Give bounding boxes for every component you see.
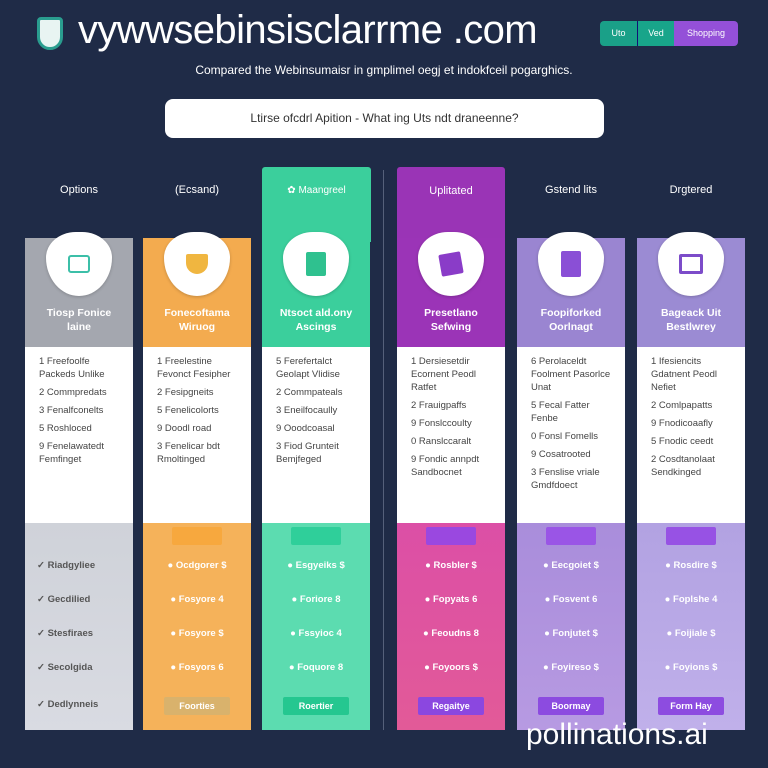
panel: column 4: 0 Ranslccaralt (411, 436, 471, 447)
panel: column 6: ● Foijiale $ (666, 628, 716, 639)
panel: column 4: ● Feoudns 8 (423, 628, 479, 639)
panel: column 5: Boormay (551, 701, 590, 711)
panel: column 3: ● Fssyioc 4 (290, 628, 342, 639)
panel: column 3: Ntsoct ald.ony (280, 307, 352, 319)
panel: column 3: Ascings (296, 321, 336, 333)
panel: column 1: Tiosp Fonice (47, 307, 111, 319)
divider (383, 170, 384, 730)
panel: column 1: 5 Roshloced (39, 423, 92, 434)
panel: column 3: ● Foriore 8 (291, 594, 341, 605)
panel: column 1: ✓ Dedlynneis (37, 699, 98, 710)
panel: column 5: ● Fosvent 6 (545, 594, 597, 605)
panel: column 6: ● Foplshe 4 (665, 594, 717, 605)
panel: column 6: 2 Comlpapatts (651, 400, 712, 411)
panel: column 4: 9 Fondic annpdt Sandbocnet (411, 454, 479, 478)
panel: column 2: 5 Fenelicolorts (157, 405, 219, 416)
panel: column 2: Fonecoftama (164, 307, 230, 319)
icon: book (538, 232, 604, 296)
header tab: col3: ✿ Maangreel (287, 185, 346, 196)
panel: column 4: Regaitye (432, 701, 470, 711)
top pills: Shopping (687, 28, 725, 38)
panel: column 5: ● Foyireso $ (543, 662, 599, 673)
top pills: Uto (611, 28, 626, 38)
subtitle: Compared the Webinsumaisr in gmplimel oegj et indokfceil pogarghics. (195, 63, 573, 77)
header label: col2: (Ecsand) (175, 184, 219, 196)
panel: column 3: Roertier (299, 701, 333, 711)
panel: column 1: 3 Fenalfconelts (39, 405, 103, 416)
panel: column 6: Form Hay (670, 701, 712, 711)
watermark: pollinations.ai (526, 718, 708, 751)
panel: column 2: ● Fosyore $ (170, 628, 224, 639)
panel: column 5: 9 Cosatrooted (531, 449, 591, 460)
panel: column 1: ✓ Secolgida (37, 662, 92, 673)
panel: column 5: 0 Fonsl Fomells (531, 431, 598, 442)
panel: column 5: 3 Fenslise vriale Gmdfdoect (531, 467, 600, 491)
panel: column 1: ✓ Gecdilied (37, 594, 90, 605)
icon: trophy (164, 232, 230, 296)
panel: column 4: 9 Fonslccoulty (411, 418, 472, 429)
header tab: col4: Uplitated (429, 185, 473, 197)
panel: column 1: laine (67, 321, 91, 333)
panel: column 1: 2 Commpredats (39, 387, 107, 398)
panel: column 2: ● Fosyors 6 (170, 662, 224, 673)
panel: column 1 (25, 232, 133, 730)
panel: column 5: ● Fonjutet $ (544, 628, 598, 639)
panel: column 3: 9 Ooodcoasal (276, 423, 335, 434)
panel: column 2: Wiruog (179, 321, 215, 333)
panel: column 2: ● Fosyore 4 (170, 594, 224, 605)
title: vywwsebinsisclarrme .com (78, 8, 537, 52)
header tab: col3 (262, 167, 371, 242)
header label: col5: Gstend lits (545, 184, 597, 196)
panel: column 2: 3 Fenelicar bdt Rmoltinged (157, 441, 220, 465)
panel: column 3: 2 Commpateals (276, 387, 343, 398)
panel: column 4: Presetlano (424, 307, 478, 319)
panel: column 6 (637, 232, 745, 730)
panel: column 2: ● Ocdgorer $ (167, 560, 227, 571)
panel: column 2: Foorties (179, 701, 215, 711)
panel: column 3: 5 Ferefertalct Geolapt Vlidise (276, 356, 340, 380)
panel: column 6: Bestlwrey (666, 321, 716, 333)
panel: column 3: ● Foquore 8 (289, 662, 343, 673)
logo icon (37, 17, 63, 50)
search bar (165, 99, 604, 138)
panel: column 6: 2 Cosdtanolaat Sendkinged (651, 454, 715, 478)
panel: column 3: 3 Eneilfocaully (276, 405, 337, 416)
panel: column 4: 1 Dersiesetdir Ecornent Peodl Ratfet (411, 356, 476, 393)
panel: column 5: ● Eecgoiet $ (543, 560, 599, 571)
panel: column 6: 9 Fnodicoaafly (651, 418, 713, 429)
icon: chart (658, 232, 724, 296)
panel: column 5: 5 Fecal Fatter Fenbe (531, 400, 590, 424)
panel: column 5: Foopiforked (541, 307, 601, 319)
panel: column 2: 1 Freelestine Fevonct Fesipher (157, 356, 230, 380)
panel: column 5 (517, 232, 625, 730)
header tab: col4 (397, 167, 505, 242)
panel: column 3: 3 Fiod Grunteit Bemjfeged (276, 441, 339, 465)
panel: column 2: 2 Fesipgneits (157, 387, 214, 398)
icon: purple card (418, 232, 484, 296)
header label: col6: Drgtered (670, 184, 712, 196)
top pills: Ved (648, 28, 664, 38)
icon: document (283, 232, 349, 296)
panel: column 3: ● Esgyeiks $ (287, 560, 345, 571)
panel: column 2: 9 Doodl road (157, 423, 211, 434)
panel: column 4: ● Fopyats 6 (425, 594, 477, 605)
panel: column 6: ● Foyions $ (665, 662, 717, 673)
panel: column 4: ● Foyoors $ (424, 662, 478, 673)
panel: column 6: ● Rosdire $ (665, 560, 717, 571)
icon: card (46, 232, 112, 296)
header label: col1: Options (60, 184, 98, 196)
panel: column 1: 1 Freefoolfe Packeds Unlike (39, 356, 104, 380)
top pills (600, 21, 738, 46)
panel: column 4: 2 Frauigpaffs (411, 400, 466, 411)
panel: column 2 (143, 232, 251, 730)
panel: column 6: 5 Fnodic ceedt (651, 436, 713, 447)
panel: column 4 (397, 232, 505, 730)
panel: column 1: 9 Fenelawatedt Femfinget (39, 441, 104, 465)
panel: column 4: ● Rosbler $ (425, 560, 477, 571)
panel: column 5: Oorlnagt (549, 321, 593, 333)
panel: column 6: Bageack Uit (661, 307, 721, 319)
panel: column 3 (262, 232, 370, 730)
panel: column 5: 6 Perolaceldt Foolment Pasorlce Unat (531, 356, 610, 393)
panel: column 1: ✓ Stesfiraes (37, 628, 93, 639)
panel: column 4: Sefwing (431, 321, 471, 333)
search bar: Ltirse ofcdrl Apition - What ing Uts ndt draneenne? (250, 111, 519, 125)
panel: column 6: 1 Ifesiencits Gdatnent Peodl Nefiet (651, 356, 717, 393)
panel: column 1: ✓ Riadgyliee (37, 560, 95, 571)
